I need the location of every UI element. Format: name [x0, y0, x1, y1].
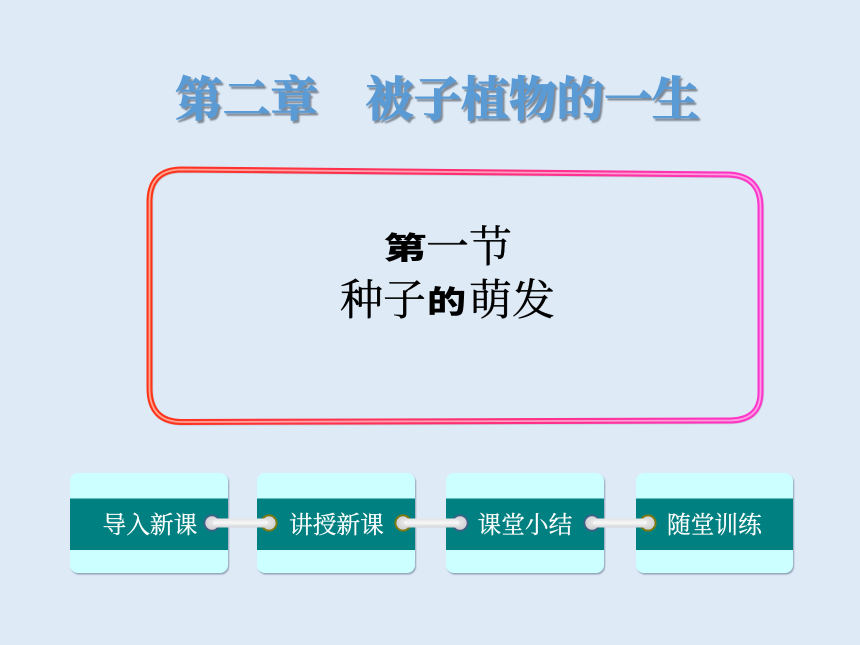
- nav button: 课堂小结: [446, 473, 604, 573]
- connector: 讲授新课 to 课堂小结: [395, 515, 468, 531]
- nav button: 随堂训练: 随堂训练: [667, 512, 763, 539]
- nav button: 课堂小结: 课堂小结: [478, 512, 573, 539]
- nav button: 导入新课: [70, 473, 228, 573]
- nav button: 讲授新课: 讲授新课: [289, 512, 384, 539]
- lesson title: 种子: [340, 278, 426, 325]
- section heading: 一节: [426, 224, 512, 272]
- section heading: 第: [384, 231, 427, 266]
- connector: 导入新课 to 讲授新课: [204, 515, 277, 531]
- lesson title: 萌发: [469, 278, 555, 325]
- lesson title: 的: [427, 286, 466, 320]
- title: 第二章 被子植物的一生: [177, 76, 702, 130]
- title: 第二章 被子植物的一生: [175, 74, 700, 127]
- section heading: [384, 224, 512, 272]
- connector: 课堂小结 to 随堂训练: [584, 515, 656, 531]
- nav button: 导入新课: 导入新课: [102, 512, 198, 539]
- lesson title: [340, 278, 555, 325]
- nav button: 随堂训练: [636, 473, 793, 573]
- panel: section title frame: [150, 170, 761, 422]
- nav button: 讲授新课: [257, 473, 415, 573]
